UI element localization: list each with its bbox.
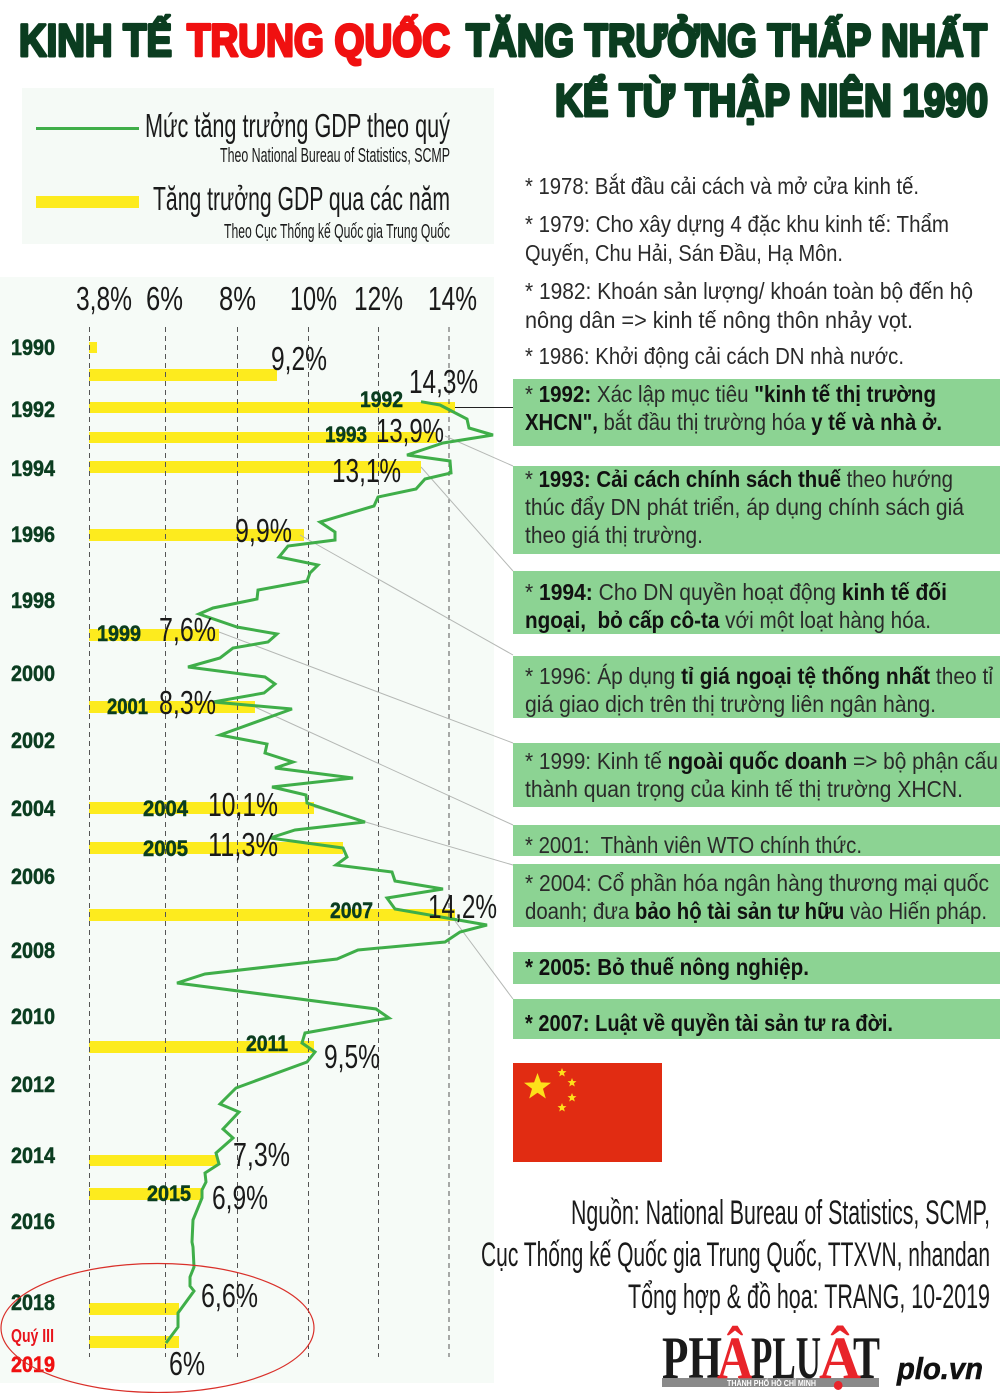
legend: green line label: Mức tăng trưởng GDP theo quý [145, 107, 450, 144]
x axis labels: 10% [290, 280, 337, 317]
legend: green line source: Theo National Bureau of Statistics, SCMP [220, 145, 450, 167]
panel: 2005: * 2005: Bỏ thuế nông nghiệp. [525, 954, 809, 980]
timeline: early reforms: * 1986: Khởi động cải cách DN nhà nước. [525, 343, 904, 369]
timeline: early reforms: * 1979: Cho xây dựng 4 đặc khu kinh tế: Thẩm [525, 211, 949, 237]
legend: yellow bar [36, 196, 139, 208]
value labels: 6,6% [201, 1277, 258, 1314]
year labels: 2014 [11, 1143, 56, 1168]
panel: 1996: giá giao dịch trên thị trường liên ngân hàng. [525, 691, 936, 717]
logo: Pháp Luật: THÀNH PHỐ HỒ CHÍ MINH [727, 1378, 816, 1388]
logo: Pháp Luật: PLU [751, 1325, 821, 1391]
logo: plo.vn: plo.vn [896, 1351, 983, 1386]
source credits [481, 1194, 990, 1316]
panel: 2007 [513, 999, 1000, 1039]
highlight ellipse [1, 1264, 314, 1392]
value labels: 14,2% [428, 888, 497, 925]
icon: China flag [513, 1063, 662, 1162]
inline year labels on bars: 1992 [360, 387, 403, 412]
panel: 1993 [513, 466, 1000, 554]
title [19, 15, 988, 126]
value labels: 13,9% [376, 412, 444, 449]
logo: Pháp Luật: T [853, 1325, 880, 1391]
inline year labels on bars: 1999 [97, 621, 141, 646]
logo: Pháp Luật: Â [717, 1325, 753, 1391]
legend panel [22, 88, 494, 244]
year labels: 2008 [11, 938, 55, 963]
value labels: 14,3% [409, 363, 478, 400]
year labels: Quý III [11, 1326, 54, 1346]
year labels: 2016 [11, 1209, 55, 1234]
x axis labels: 8% [219, 280, 256, 317]
year labels: 2018 [11, 1290, 55, 1315]
title: TRUNG QUỐC [187, 15, 450, 66]
year labels: 2002 [11, 728, 55, 753]
inline year labels on bars: 2015 [147, 1181, 191, 1206]
legend: green line [36, 127, 139, 130]
value labels: 9,2% [271, 340, 327, 377]
inline year labels on bars: 2011 [246, 1031, 288, 1056]
year labels: 2004 [11, 796, 56, 821]
value labels: 6% [169, 1345, 205, 1382]
inline year labels on bars: 2001 [107, 694, 148, 719]
value labels: 9,5% [324, 1038, 380, 1075]
panel: 1996: * 1996: Áp dụng tỉ giá ngoại tệ thống nhất theo tỉ [525, 663, 993, 689]
panel: 1996 [513, 656, 1000, 718]
panel: 2007: * 2007: Luật về quyền tài sản tư ra đời. [525, 1010, 893, 1036]
panel: 1994: ngoại, bỏ cấp cô-ta với một loạt hàng hóa. [525, 607, 931, 633]
panel: 1992: * 1992: Xác lập mục tiêu "kinh tế thị trường [525, 381, 936, 407]
year labels: 2010 [11, 1004, 55, 1029]
inline year labels on bars: 2005 [143, 836, 188, 861]
inline year labels on bars: 2004 [143, 796, 189, 821]
value labels: 8,3% [159, 684, 216, 721]
panel: 1993: thúc đẩy DN phát triển, áp dụng chính sách giá [525, 494, 964, 520]
panel: 2005 [513, 952, 1000, 984]
inline year labels on bars [97, 387, 403, 1206]
value labels: 6,9% [212, 1179, 268, 1216]
panel: 2001: * 2001: Thành viên WTO chính thức. [525, 832, 862, 858]
inline year labels on bars: 1993 [325, 422, 367, 447]
panel: 1993: * 1993: Cải cách chính sách thuế theo hướng [525, 466, 953, 492]
timeline: early reforms: Quyến, Chu Hải, Sán Đầu, Hạ Môn. [525, 240, 843, 266]
panel: 1994 [513, 571, 1000, 634]
legend: yellow bar source: Theo Cục Thống kế Quốc gia Trung Quốc [224, 221, 450, 243]
panel: 2001 [513, 825, 1000, 858]
panel: 1993: theo giá thị trường. [525, 522, 703, 548]
timeline: early reforms: * 1978: Bắt đầu cải cách và mở cửa kinh tế. [525, 173, 919, 199]
year labels: 2012 [11, 1072, 55, 1097]
chart panel [0, 277, 513, 1383]
logo: Pháp Luật: PH [662, 1325, 722, 1391]
value labels: 7,3% [233, 1136, 290, 1173]
value labels [159, 340, 497, 1382]
panel: 1992 [513, 379, 1000, 446]
value labels: 13,1% [332, 452, 401, 489]
x axis labels: 6% [146, 280, 183, 317]
panel: 2004: doanh; đưa bảo hộ tài sản tư hữu vào Hiến pháp. [525, 898, 987, 924]
year labels: 2019 [11, 1352, 55, 1377]
value labels: 10,1% [208, 786, 278, 823]
panel: 1994: * 1994: Cho DN quyền hoạt động kinh tế đối [525, 579, 947, 605]
timeline: early reforms: nông dân => kinh tế nông thôn nhảy vọt. [525, 307, 913, 333]
logo: Pháp Luật [662, 1325, 880, 1391]
year labels: 1996 [11, 522, 55, 547]
title: KINH TẾ [19, 15, 172, 66]
year labels: 2006 [11, 864, 55, 889]
logo: Pháp Luật: Ậ [819, 1325, 861, 1391]
x axis labels: 12% [354, 280, 403, 317]
panel: 1999: thành quan trọng của kinh tế thị trường XHCN. [525, 776, 963, 802]
panel: 1999: * 1999: Kinh tế ngoài quốc doanh => bộ phận cấu [525, 748, 998, 774]
value labels: 11,3% [208, 826, 278, 863]
value labels: 9,9% [235, 512, 292, 549]
year labels [11, 335, 56, 1377]
x axis labels [76, 280, 477, 317]
quarterly GDP line [166, 402, 493, 1343]
legend: yellow bar label: Tăng trưởng GDP qua các năm [153, 180, 450, 217]
value labels: 7,6% [159, 611, 216, 648]
panel: 2004 [513, 864, 1000, 927]
year labels: 1998 [11, 588, 55, 613]
year labels: 1994 [11, 456, 56, 481]
yearly GDP bars [89, 342, 455, 1348]
year labels: 1992 [11, 397, 55, 422]
x axis labels: 3,8% [76, 280, 132, 317]
timeline: early reforms [525, 173, 973, 369]
panel: 1992: XHCN", bắt đầu thị trường hóa y tế và nhà ở. [525, 409, 942, 435]
year labels: 1990 [11, 335, 55, 360]
leader lines [219, 408, 513, 999]
year labels: 2000 [11, 661, 55, 686]
x axis labels: 14% [428, 280, 477, 317]
inline year labels on bars: 2007 [330, 898, 373, 923]
panel: 1999 [513, 743, 1000, 807]
